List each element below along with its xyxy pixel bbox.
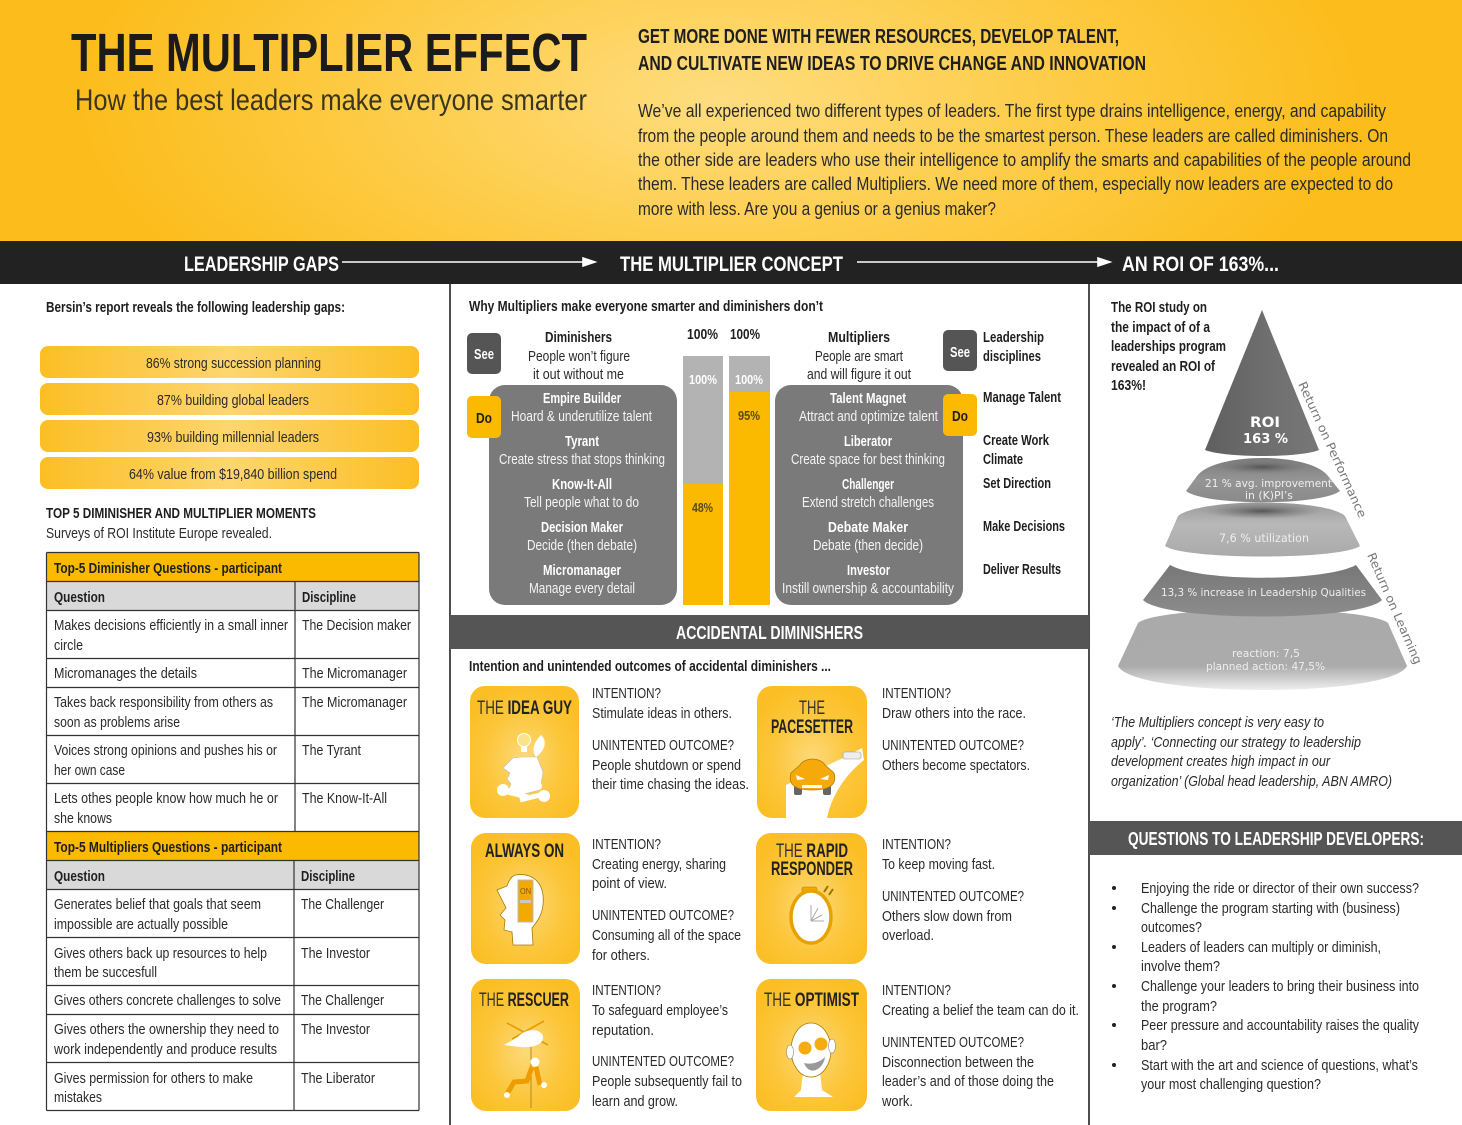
questions list: Peer pressure and accountability raises the quality bbox=[1141, 1018, 1420, 1034]
table: diminisher and multiplier questions: Gives others back up resources to help bbox=[54, 946, 267, 962]
text: pacesetter intention and outcome: Draw others into the race. bbox=[882, 706, 1026, 722]
table: diminisher and multiplier questions: Voices strong opinions and pushes his or bbox=[54, 743, 277, 759]
text: rapid responder intention and outcome bbox=[882, 837, 1024, 944]
panel: diminisher types: Decision Maker bbox=[541, 520, 623, 536]
header tagline: AND CULTIVATE NEW IDEAS TO DRIVE CHANGE AND INNOVATION bbox=[638, 53, 1146, 75]
testimonial quote: development creates high impact in our bbox=[1111, 754, 1331, 770]
table: diminisher and multiplier questions: The Micromanager bbox=[302, 695, 407, 711]
subtitle: How the best leaders make everyone smarter bbox=[75, 84, 587, 117]
panel: multiplier types: Liberator bbox=[844, 434, 892, 450]
multipliers heading: People are smart bbox=[815, 349, 903, 365]
text: idea guy intention and outcome: People shutdown or spend bbox=[592, 758, 741, 774]
text: always on intention and outcome: Creating energy, sharing bbox=[592, 857, 726, 873]
table: diminisher and multiplier questions: Lets othes people know how much he or bbox=[54, 791, 278, 807]
icon: car on road bbox=[786, 748, 864, 818]
text: rescuer intention and outcome: learn and grow. bbox=[592, 1094, 678, 1110]
icon: head with on switch: ON bbox=[520, 887, 531, 896]
table: diminisher and multiplier questions: The Challenger bbox=[301, 897, 384, 913]
intro text: Bersin’s report reveals the following leadership gaps: bbox=[46, 300, 345, 316]
card: the idea guy: THE IDEA GUY bbox=[477, 698, 572, 719]
tag: do left bbox=[467, 396, 501, 438]
text: always on intention and outcome: INTENTION? bbox=[592, 837, 661, 853]
text: idea guy intention and outcome: INTENTION? bbox=[592, 686, 661, 702]
table: diminisher and multiplier questions: The Tyrant bbox=[302, 743, 361, 759]
pyramid tier: base bbox=[1118, 610, 1407, 690]
questions list: the program? bbox=[1141, 999, 1217, 1015]
moments heading bbox=[46, 506, 316, 542]
pyramid labels: ROI bbox=[1250, 415, 1280, 431]
tag: see left: See bbox=[474, 347, 494, 363]
panel: multiplier types: Instill ownership & accountability bbox=[782, 581, 955, 597]
title: THE MULTIPLIER EFFECT bbox=[71, 23, 587, 83]
text: idea guy intention and outcome: UNINTENTED OUTCOME? bbox=[592, 738, 734, 754]
table: diminisher and multiplier questions: Takes back responsibility from others as bbox=[54, 695, 273, 711]
tag: see right bbox=[943, 330, 977, 371]
text: rescuer intention and outcome: UNINTENTED OUTCOME? bbox=[592, 1054, 734, 1070]
panel: multiplier types: Extend stretch challenges bbox=[802, 495, 934, 511]
panel: multiplier types: Investor bbox=[847, 563, 890, 579]
table: diminisher and multiplier questions: work independently and produce results bbox=[53, 1042, 277, 1058]
pyramid tier: improvement bbox=[1186, 458, 1340, 502]
leadership disciplines list: disciplines bbox=[983, 349, 1041, 365]
pyramid labels: planned action: 47,5% bbox=[1206, 660, 1325, 673]
tag: do left: Do bbox=[476, 411, 492, 427]
card: the optimist bbox=[756, 979, 867, 1111]
text: rescuer intention and outcome: INTENTION? bbox=[592, 983, 661, 999]
section intro: Intention and unintended outcomes of accidental diminishers ... bbox=[469, 659, 831, 675]
panel: multiplier concept bbox=[467, 299, 1065, 605]
card: the rescuer bbox=[471, 979, 580, 1111]
table: diminisher and multiplier questions: Question bbox=[54, 869, 105, 885]
panel: multiplier types: Debate (then decide) bbox=[813, 538, 923, 554]
bar chart: utilisation of capability: 100% bbox=[735, 373, 763, 387]
multipliers heading: Multipliers bbox=[828, 330, 890, 346]
diminishers heading: it out without me bbox=[533, 367, 624, 383]
panel: diminisher types: Hoard & underutilize talent bbox=[511, 409, 652, 425]
card: the idea guy bbox=[470, 686, 579, 818]
panel: diminisher types: Know-It-All bbox=[552, 477, 612, 493]
tag: do right bbox=[943, 394, 977, 436]
panel: multiplier types: Talent Magnet bbox=[830, 391, 906, 407]
pyramid labels: in (K)PI’s bbox=[1245, 489, 1293, 502]
band heading: multiplier concept: THE MULTIPLIER CONCEPT bbox=[620, 253, 843, 276]
pyramid tier: apex bbox=[1205, 310, 1319, 456]
card: the pacesetter bbox=[757, 686, 867, 818]
pyramid labels: reaction: 7,5 bbox=[1232, 647, 1300, 660]
text: pacesetter intention and outcome: UNINTENTED OUTCOME? bbox=[882, 738, 1024, 754]
text: always on intention and outcome: point of view. bbox=[592, 876, 667, 892]
text: optimist intention and outcome: Creating a belief the team can do it. bbox=[882, 1003, 1079, 1019]
text: rapid responder intention and outcome: UNINTENTED OUTCOME? bbox=[882, 889, 1024, 905]
panel: multiplier types: Debate Maker bbox=[828, 520, 908, 536]
panel: diminisher types bbox=[489, 385, 677, 605]
table: diminisher and multiplier questions: her own case bbox=[54, 763, 125, 779]
leadership disciplines list: Deliver Results bbox=[983, 562, 1061, 578]
table: diminisher and multiplier questions: circle bbox=[54, 638, 83, 654]
multipliers heading: and will figure it out bbox=[807, 367, 911, 383]
text: idea guy intention and outcome bbox=[592, 686, 749, 793]
text: rescuer intention and outcome: To safeguard employee’s bbox=[592, 1003, 728, 1019]
table: diminisher and multiplier questions: Makes decisions efficiently in a small inner bbox=[54, 618, 288, 634]
table: diminisher and multiplier questions: Discipline bbox=[301, 869, 355, 885]
header banner bbox=[0, 0, 1462, 241]
gap pills: 86% strong succession planning bbox=[146, 356, 321, 372]
header intro paragraph bbox=[638, 100, 1411, 219]
icon: open head with light bulbs bbox=[497, 734, 550, 802]
pyramid tier: leadership qualities bbox=[1143, 565, 1382, 616]
icon: stopwatch bbox=[791, 886, 833, 943]
icon: helicopter rescue bbox=[504, 1021, 548, 1108]
leadership disciplines list: Make Decisions bbox=[983, 519, 1065, 535]
bar chart: utilisation of capability bbox=[683, 327, 770, 605]
label: return on learning: Return on Learning bbox=[1364, 551, 1425, 666]
arrow: gaps to concept bbox=[342, 258, 595, 266]
text: optimist intention and outcome: work. bbox=[881, 1094, 913, 1110]
gap pills: 93% building millennial leaders bbox=[147, 430, 319, 446]
questions list: Challenge your leaders to bring their business into bbox=[1141, 979, 1419, 995]
leadership disciplines list: Climate bbox=[983, 452, 1023, 468]
bar chart: utilisation of capability: 100% bbox=[730, 327, 760, 343]
table: diminisher and multiplier questions: The Investor bbox=[301, 1022, 370, 1038]
black flow band bbox=[0, 241, 1462, 284]
panel: roi bbox=[1111, 300, 1425, 790]
table: diminisher and multiplier questions: Micromanages the details bbox=[54, 666, 197, 682]
testimonial quote bbox=[1111, 715, 1392, 790]
roi intro text: 163%! bbox=[1111, 378, 1146, 394]
header tagline bbox=[638, 26, 1146, 75]
table: diminisher and multiplier questions: mistakes bbox=[54, 1090, 102, 1106]
gap pills: 64% value from $19,840 billion spend bbox=[129, 467, 337, 483]
panel: diminisher types: Manage every detail bbox=[529, 581, 635, 597]
moments heading: Surveys of ROI Institute Europe revealed. bbox=[46, 526, 272, 542]
table: diminisher and multiplier questions: soon as problems arise bbox=[54, 715, 180, 731]
table: diminisher and multiplier questions: The Know-It-All bbox=[302, 791, 387, 807]
pyramid labels: 163 % bbox=[1243, 432, 1288, 447]
diminishers heading: Diminishers bbox=[545, 330, 612, 346]
text: rapid responder intention and outcome: overload. bbox=[882, 928, 934, 944]
panel: multiplier types: Create space for best thinking bbox=[791, 452, 945, 468]
questions band bbox=[1089, 821, 1462, 855]
card: the rescuer: THE RESCUER bbox=[479, 990, 569, 1011]
band heading: leadership gaps: LEADERSHIP GAPS bbox=[184, 253, 339, 276]
table: diminisher and multiplier questions: Gives permission for others to make bbox=[54, 1071, 253, 1087]
header tagline: GET MORE DONE WITH FEWER RESOURCES, DEVELOP TALENT, bbox=[638, 26, 1119, 48]
table: diminisher and multiplier questions: The Challenger bbox=[301, 993, 384, 1009]
questions list: outcomes? bbox=[1141, 920, 1202, 936]
table: diminisher and multiplier questions: The Liberator bbox=[301, 1071, 375, 1087]
card: always on: ALWAYS ON bbox=[485, 841, 564, 862]
table: diminisher and multiplier questions: impossible are actually possible bbox=[54, 917, 228, 933]
card: the rapid responder bbox=[756, 833, 867, 964]
section band bbox=[450, 615, 1089, 649]
tag: do right: Do bbox=[952, 409, 968, 425]
text: always on intention and outcome: Consuming all of the space bbox=[592, 928, 741, 944]
arrow: concept to roi bbox=[857, 258, 1110, 266]
gap pills: 87% building global leaders bbox=[157, 393, 309, 409]
text: rapid responder intention and outcome: Others slow down from bbox=[882, 909, 1012, 925]
panel: leadership gaps bbox=[40, 300, 419, 1110]
panel: questions to leadership developers bbox=[1089, 821, 1462, 1093]
leadership disciplines list bbox=[983, 330, 1065, 578]
tag: see left bbox=[467, 333, 501, 374]
roi intro text: The ROI study on bbox=[1111, 300, 1207, 316]
pyramid labels: 13,3 % increase in Leadership Qualities bbox=[1161, 586, 1366, 599]
panel: multiplier types bbox=[775, 385, 963, 605]
table: diminisher and multiplier questions: them be succesfull bbox=[54, 965, 157, 981]
concept heading: Why Multipliers make everyone smarter and diminishers don’t bbox=[469, 299, 823, 315]
text: pacesetter intention and outcome: Others become spectators. bbox=[882, 758, 1030, 774]
panel: diminisher types: Empire Builder bbox=[543, 391, 621, 407]
leadership disciplines list: Manage Talent bbox=[983, 390, 1061, 406]
text: pacesetter intention and outcome bbox=[882, 686, 1030, 774]
bar chart: utilisation of capability: 48% bbox=[692, 501, 713, 515]
bar chart: utilisation of capability: 100% bbox=[687, 327, 718, 343]
table: diminisher and multiplier questions: she knows bbox=[54, 811, 112, 827]
roi intro text: leaderships program bbox=[1111, 339, 1226, 355]
section band: ACCIDENTAL DIMINISHERS bbox=[676, 623, 863, 643]
roi intro text: revealed an ROI of bbox=[1111, 359, 1215, 375]
text: optimist intention and outcome: Disconnection between the bbox=[882, 1055, 1034, 1071]
diminishers heading: People won’t figure bbox=[528, 349, 630, 365]
table: diminisher and multiplier questions: Question bbox=[54, 590, 105, 606]
multipliers heading bbox=[807, 330, 911, 383]
panel: diminisher types: Decide (then debate) bbox=[527, 538, 637, 554]
pyramid labels: 21 % avg. improvement bbox=[1205, 477, 1333, 490]
questions list: your most challenging question? bbox=[1141, 1077, 1321, 1093]
text: optimist intention and outcome: UNINTENTED OUTCOME? bbox=[882, 1035, 1024, 1051]
leadership disciplines list: Create Work bbox=[983, 433, 1050, 449]
bar chart: utilisation of capability: 95% bbox=[738, 409, 760, 423]
pyramid labels bbox=[1161, 415, 1366, 673]
panel: diminisher types: Tell people what to do bbox=[524, 495, 639, 511]
table: diminisher and multiplier questions: The Decision maker bbox=[302, 618, 411, 634]
panel: diminisher types: Create stress that stops thinking bbox=[499, 452, 665, 468]
card: the pacesetter: THE bbox=[799, 698, 825, 719]
text: optimist intention and outcome: leader’s and of those doing the bbox=[882, 1074, 1054, 1090]
chart: roi pyramid bbox=[1118, 310, 1425, 690]
questions list: Challenge the program starting with (business) bbox=[1141, 901, 1400, 917]
panel: multiplier types: Challenger bbox=[842, 477, 894, 493]
text: idea guy intention and outcome: their time chasing the ideas. bbox=[592, 777, 749, 793]
band heading: roi: AN ROI OF 163%... bbox=[1122, 253, 1279, 276]
text: optimist intention and outcome: INTENTION? bbox=[882, 983, 951, 999]
gap pills bbox=[40, 346, 419, 489]
questions list bbox=[1112, 881, 1420, 1093]
leadership disciplines list: Leadership bbox=[983, 330, 1044, 346]
moments heading: TOP 5 DIMINISHER AND MULTIPLIER MOMENTS bbox=[46, 506, 316, 522]
card: the pacesetter: PACESETTER bbox=[771, 717, 853, 738]
text: pacesetter intention and outcome: INTENTION? bbox=[882, 686, 951, 702]
card: the rapid responder: RESPONDER bbox=[771, 859, 853, 880]
text: always on intention and outcome bbox=[592, 837, 741, 964]
table: diminisher and multiplier questions: Top-5 Diminisher Questions - participant bbox=[54, 561, 282, 577]
testimonial quote: ‘The Multipliers concept is very easy to bbox=[1111, 715, 1324, 731]
table: diminisher and multiplier questions: The Micromanager bbox=[302, 666, 407, 682]
text: rapid responder intention and outcome: To keep moving fast. bbox=[882, 857, 995, 873]
pyramid labels: 7,6 % utilization bbox=[1219, 531, 1309, 545]
roi intro text: the impact of of a bbox=[1111, 320, 1211, 336]
text: always on intention and outcome: UNINTENTED OUTCOME? bbox=[592, 908, 734, 924]
questions list: involve them? bbox=[1141, 959, 1220, 975]
panel: diminisher types: Tyrant bbox=[565, 434, 599, 450]
text: rescuer intention and outcome: reputation. bbox=[592, 1023, 654, 1039]
card: the rapid responder: THE RAPID bbox=[776, 841, 848, 862]
text: rapid responder intention and outcome: INTENTION? bbox=[882, 837, 951, 853]
card: always on bbox=[471, 833, 580, 964]
pyramid tier: utilization bbox=[1165, 502, 1360, 556]
tag: see right: See bbox=[950, 345, 970, 361]
panel: diminisher types: Micromanager bbox=[543, 563, 621, 579]
label: return on performance: Return on Performance bbox=[1295, 379, 1369, 520]
header intro paragraph: more with less. Are you a genius or a genius maker? bbox=[638, 198, 996, 219]
text: idea guy intention and outcome: Stimulate ideas in others. bbox=[592, 706, 732, 722]
diminishers heading bbox=[528, 330, 630, 383]
questions list: Leaders of leaders can multiply or diminish, bbox=[1141, 940, 1381, 956]
table: diminisher and multiplier questions: Generates belief that goals that seem bbox=[54, 897, 261, 913]
panel: multiplier types: Attract and optimize talent bbox=[799, 409, 938, 425]
panel: accidental diminishers bbox=[450, 615, 1089, 1111]
table: diminisher and multiplier questions: The Investor bbox=[301, 946, 370, 962]
roi intro text bbox=[1111, 300, 1226, 394]
questions list: bar? bbox=[1141, 1038, 1167, 1054]
testimonial quote: apply’. ‘Connecting our strategy to leadership bbox=[1111, 735, 1361, 751]
text: rescuer intention and outcome bbox=[592, 983, 742, 1110]
table: diminisher and multiplier questions: Gives others concrete challenges to solve bbox=[54, 993, 281, 1009]
text: rescuer intention and outcome: People subsequently fail to bbox=[592, 1074, 742, 1090]
card: the optimist: THE OPTIMIST bbox=[764, 990, 859, 1011]
bar chart: utilisation of capability: 100% bbox=[689, 373, 717, 387]
questions list: Start with the art and science of questions, what’s bbox=[1141, 1058, 1418, 1074]
table: diminisher and multiplier questions bbox=[46, 552, 419, 1110]
testimonial quote: organization’ (Global head leadership, ABN AMRO) bbox=[1111, 774, 1392, 790]
table: diminisher and multiplier questions: Discipline bbox=[302, 590, 356, 606]
questions list: Enjoying the ride or director of their own success? bbox=[1141, 881, 1419, 897]
text: always on intention and outcome: for others. bbox=[592, 948, 650, 964]
icon: smiling head with glasses bbox=[786, 1023, 836, 1097]
leadership disciplines list: Set Direction bbox=[983, 476, 1051, 492]
table: diminisher and multiplier questions: Gives others the ownership they need to bbox=[54, 1022, 279, 1038]
text: optimist intention and outcome bbox=[881, 983, 1079, 1110]
table: diminisher and multiplier questions: Top-5 Multipliers Questions - participant bbox=[54, 840, 282, 856]
